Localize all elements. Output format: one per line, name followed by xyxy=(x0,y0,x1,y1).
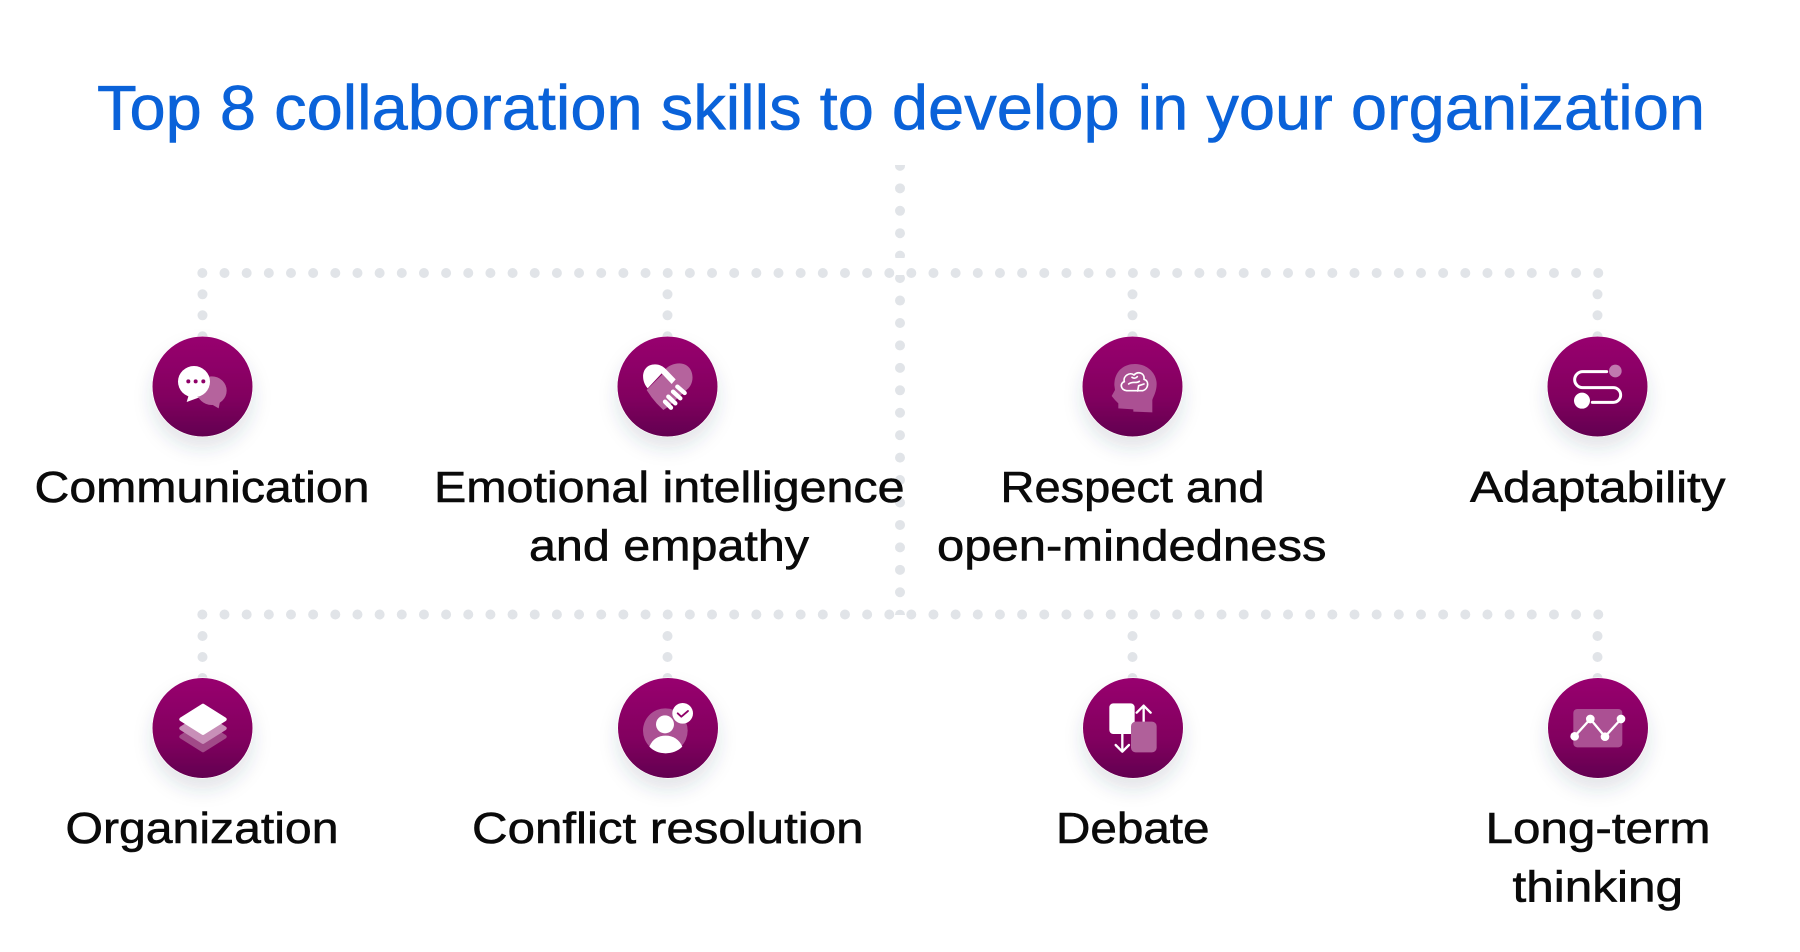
label: Adaptability xyxy=(1470,463,1726,512)
label: Communication xyxy=(34,463,370,512)
icon: line chart xyxy=(1548,678,1648,778)
skill: Debate xyxy=(1056,678,1210,853)
label: Organization xyxy=(66,804,338,853)
title: Top 8 collaboration skills to develop in your organization xyxy=(97,74,1705,144)
label: and empathy xyxy=(529,522,809,570)
label: open-mindedness xyxy=(937,522,1326,570)
icon: winding path xyxy=(1547,336,1648,437)
icon: swapping cards with arrows xyxy=(1083,678,1183,778)
label xyxy=(1486,804,1710,912)
label xyxy=(937,463,1326,570)
label: thinking xyxy=(1512,862,1683,912)
label: Respect and xyxy=(1000,463,1264,512)
label: Long-term xyxy=(1486,804,1710,853)
skill: Adaptability xyxy=(1470,336,1726,512)
skill: Organization xyxy=(66,678,338,853)
icon: stacked layers xyxy=(152,678,253,778)
dotted connector lines xyxy=(202,166,1598,679)
skill: Conflict resolution xyxy=(472,678,864,853)
icon: person with check badge xyxy=(618,678,718,778)
icon: head with brain xyxy=(1082,336,1183,437)
skill: Respect and open-mindedness xyxy=(937,336,1326,570)
icon: speech bubbles xyxy=(152,336,253,437)
label: Debate xyxy=(1056,804,1210,853)
label: Conflict resolution xyxy=(472,804,864,853)
icon: handshake heart xyxy=(617,336,718,437)
label: Emotional intelligence xyxy=(434,463,904,512)
label xyxy=(434,463,904,570)
skill: Long-term thinking xyxy=(1486,678,1710,912)
skill: Communication xyxy=(34,336,370,512)
skill: Emotional intelligence and empathy xyxy=(434,336,904,570)
